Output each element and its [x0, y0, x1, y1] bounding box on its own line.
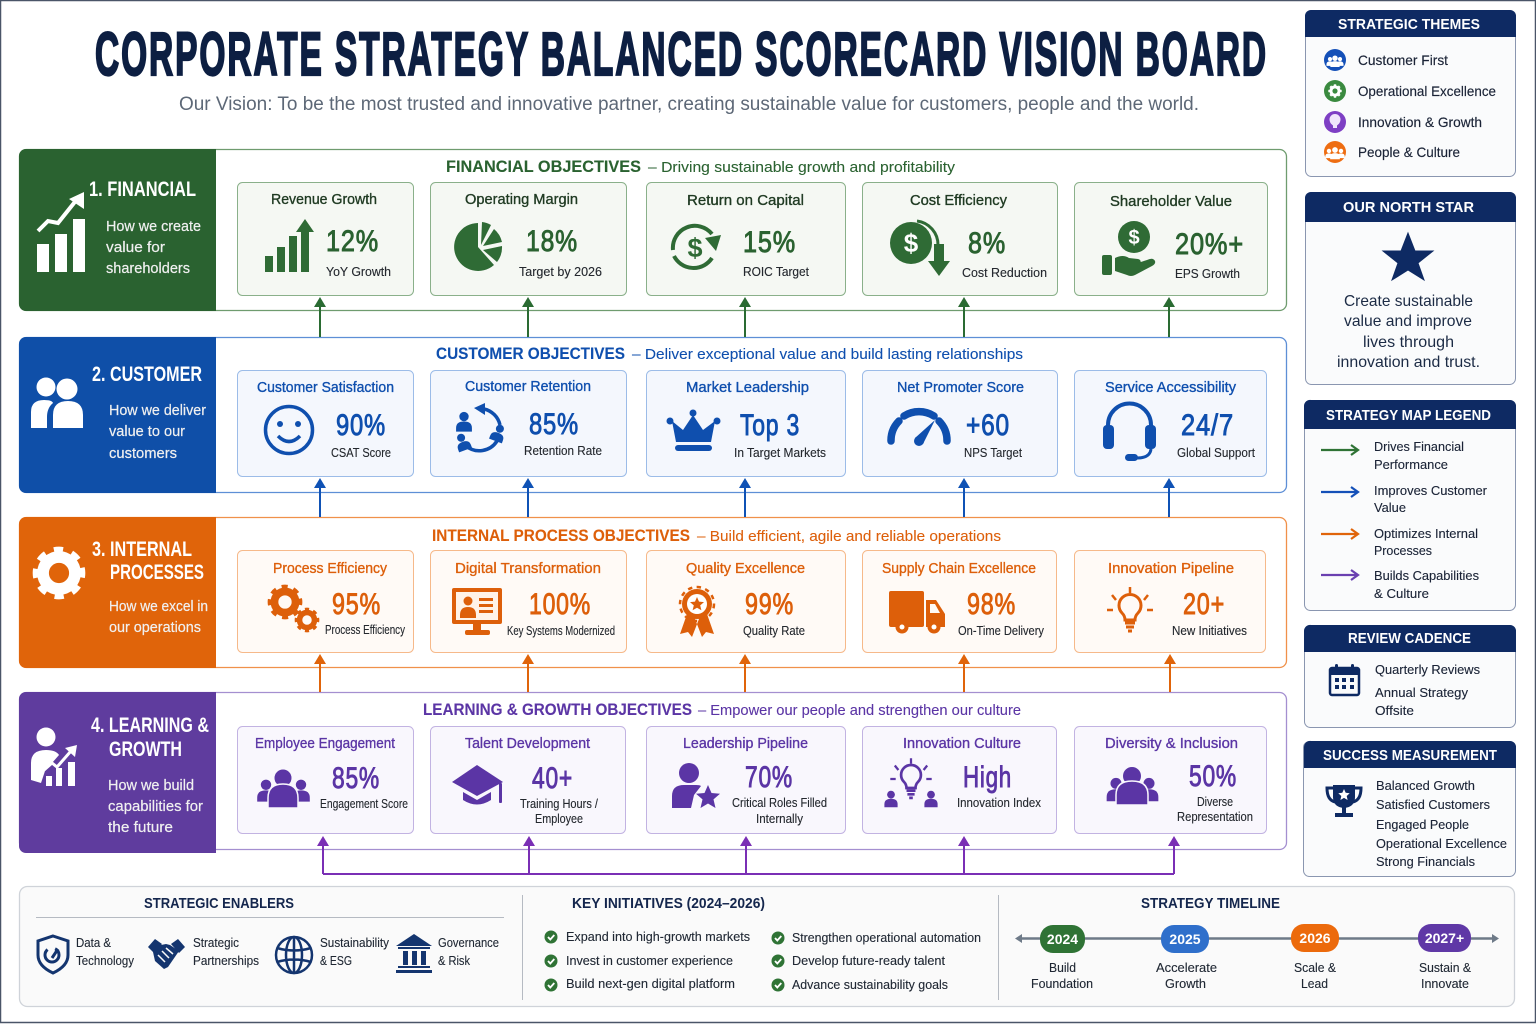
section: key initiatives: Build next-gen digital platform: [566, 977, 735, 991]
arrows: learning to internal processes: [314, 654, 1176, 692]
side panel: customer: value to our: [109, 423, 185, 440]
card: operating margin: Target by 2026: [519, 265, 602, 279]
side panel: internal processes: How we excel in: [109, 598, 208, 615]
card: digital transformation: 100%: [529, 588, 591, 621]
legend: optimizes internal processes: Optimizes Internal: [1374, 526, 1478, 541]
card: innovation culture: Innovation Index: [957, 796, 1042, 810]
heading: financial objectives: – Driving sustainable growth and profitability: [648, 159, 956, 176]
card: net promoter score: [862, 370, 1058, 476]
bottom panel: [20, 886, 1514, 1006]
card: innovation culture: [862, 726, 1056, 834]
text block: north star statement: lives through: [1363, 334, 1454, 351]
section: strategic enablers: STRATEGIC ENABLERS: [144, 895, 294, 912]
card: supply chain excellence: Supply Chain Excellence: [882, 560, 1036, 577]
sidebar: review cadence: [1304, 625, 1516, 728]
card: talent development: 40+: [532, 762, 573, 795]
section: key initiatives: Invest in customer experience: [566, 954, 733, 968]
icon: three people: [257, 769, 310, 808]
icon: crown: [666, 410, 720, 451]
card: return on capital: Return on Capital: [687, 192, 804, 209]
theme: innovation and growth: [1324, 111, 1482, 133]
enabler: strategic partnerships: Strategic: [193, 936, 239, 950]
card: diversity and inclusion: Representation: [1177, 810, 1253, 824]
card: market leadership: Market Leadership: [686, 379, 809, 396]
card: quality excellence: 99%: [745, 588, 794, 621]
icon: two gears: [270, 587, 318, 631]
icon: gauge: [891, 412, 947, 446]
icon: award ribbon: [680, 587, 714, 637]
legend: drives financial performance: Performance: [1374, 457, 1448, 472]
card: leadership pipeline: [646, 726, 846, 834]
heading: learning and growth objectives: [423, 700, 1021, 719]
icon: growth chart: [37, 192, 85, 272]
heading: customer objectives: – Deliver exceptional value and build lasting relationships: [632, 346, 1023, 363]
side panel: customer: 2. CUSTOMER: [92, 363, 202, 386]
milestone: 2024: [1031, 925, 1093, 991]
card: process efficiency: Process Efficiency: [273, 560, 387, 577]
card: market leadership: In Target Markets: [734, 446, 826, 460]
section: strategy timeline: [1015, 895, 1499, 991]
heading: financial objectives: [446, 157, 956, 176]
card: diversity and inclusion: 50%: [1189, 760, 1237, 793]
card: innovation culture: Innovation Culture: [903, 735, 1021, 752]
card: return on capital: 15%: [743, 226, 796, 259]
card: customer satisfaction: 90%: [336, 409, 386, 442]
card: employee engagement: [238, 726, 414, 834]
text block: north star statement: innovation and trust.: [1337, 354, 1480, 371]
enabler: governance and risk: Governance: [438, 936, 499, 950]
card: supply chain excellence: [862, 550, 1056, 652]
card: return on capital: [646, 182, 846, 296]
heading: customer objectives: CUSTOMER OBJECTIVES: [436, 344, 625, 363]
card: quality excellence: Quality Excellence: [686, 560, 805, 577]
card: customer retention: 85%: [529, 408, 579, 441]
legend: improves customer value: Value: [1374, 500, 1406, 515]
card: diversity and inclusion: [1074, 726, 1266, 834]
card: operating margin: 18%: [526, 225, 578, 258]
icon: trophy: [1327, 785, 1361, 817]
side panel: learning and growth: capabilities for: [108, 798, 203, 815]
heading: learning and growth objectives: LEARNING & GROWTH OBJECTIVES: [423, 700, 692, 719]
card: leadership pipeline: 70%: [745, 761, 793, 794]
card: net promoter score: +60: [966, 409, 1010, 442]
milestone: 2025: [1156, 925, 1217, 991]
milestone: 2026: [1291, 924, 1339, 991]
sidebar: strategic themes: STRATEGIC THEMES: [1338, 16, 1480, 33]
enabler: strategic partnerships: [148, 936, 259, 969]
side panel: learning and growth: [19, 692, 216, 853]
card: innovation pipeline: New Initiatives: [1172, 624, 1247, 638]
icon: graduation cap: [452, 765, 503, 804]
card: revenue growth: Revenue Growth: [271, 191, 377, 208]
icon: person with star: [672, 763, 720, 808]
card: innovation pipeline: Innovation Pipeline: [1108, 560, 1234, 577]
card: leadership pipeline: Internally: [756, 812, 804, 826]
card: talent development: Talent Development: [465, 735, 591, 752]
enabler: governance and risk: [396, 934, 499, 973]
enabler: data and technology: Data &: [76, 936, 112, 950]
card: revenue growth: 12%: [326, 225, 379, 258]
card: net promoter score: Net Promoter Score: [897, 379, 1024, 396]
card: supply chain excellence: On-Time Delivery: [958, 624, 1045, 638]
section: key initiatives: Develop future-ready talent: [792, 954, 946, 968]
side panel: customer: [19, 337, 216, 493]
card: talent development: Training Hours /: [520, 797, 598, 811]
side panel: internal processes: PROCESSES: [110, 561, 204, 584]
heading: internal process objectives: INTERNAL PROCESS OBJECTIVES: [432, 526, 690, 545]
icon: rising bars: [265, 219, 314, 272]
sidebar: strategy map legend: STRATEGY MAP LEGEND: [1326, 407, 1491, 424]
icon: retention cycle with people: [453, 403, 508, 452]
enabler: sustainability and ESG: [276, 936, 390, 973]
theme: customer first: Customer First: [1358, 52, 1448, 68]
milestone: 2024: 2024: [1047, 931, 1078, 947]
theme: operational excellence: Operational Excellence: [1358, 83, 1496, 99]
card: process efficiency: [238, 550, 414, 652]
legend: optimizes internal processes: Processes: [1374, 543, 1432, 558]
side panel: learning and growth: 4. LEARNING &: [91, 714, 209, 737]
side panel: financial: 1. FINANCIAL: [89, 178, 196, 201]
milestone: 2027+: [1418, 924, 1472, 991]
card: cost efficiency: Cost Efficiency: [910, 192, 1007, 209]
milestone: 2025: 2025: [1169, 931, 1201, 947]
text block: success criteria: Operational Excellence: [1376, 836, 1507, 851]
icon: star: [1383, 233, 1433, 280]
panel: learning and growth: [19, 692, 1286, 853]
legend: builds capabilities and culture: & Culture: [1374, 586, 1429, 601]
card: talent development: Employee: [535, 812, 583, 826]
card: diversity and inclusion: Diverse: [1197, 795, 1233, 809]
theme: customer first: [1324, 49, 1448, 71]
legend: drives financial performance: Drives Financial: [1374, 439, 1464, 454]
side panel: customer: How we deliver: [109, 402, 206, 419]
card: shareholder value: 20%+: [1175, 228, 1244, 261]
text block: review schedule: Offsite: [1375, 703, 1414, 718]
section: strategic enablers: [36, 895, 504, 973]
milestone: 2026: 2026: [1299, 930, 1331, 946]
card: net promoter score: NPS Target: [964, 446, 1022, 460]
side panel: customer: customers: [109, 445, 177, 462]
icon: light bulb: [1107, 587, 1153, 631]
side panel: financial: [19, 149, 216, 311]
enabler: sustainability and ESG: & ESG: [320, 954, 352, 968]
sidebar: our north star: [1305, 192, 1516, 384]
card: market leadership: [646, 370, 846, 476]
card: employee engagement: Employee Engagement: [255, 735, 396, 752]
card: process efficiency: 95%: [332, 588, 381, 621]
icon: headset: [1103, 404, 1156, 461]
card: shareholder value: EPS Growth: [1175, 267, 1240, 281]
text block: success criteria: Balanced Growth: [1376, 778, 1475, 793]
card: innovation pipeline: [1074, 550, 1266, 652]
subtitle: vision statement: Our Vision: To be the most trusted and innovative partner, creating sustainable value for customers, people and the world.: [179, 94, 1199, 115]
card: service accessibility: Service Accessibility: [1105, 379, 1236, 396]
milestone: 2027+: 2027+: [1425, 930, 1464, 946]
side panel: learning and growth: the future: [108, 819, 173, 836]
card: market leadership: Top 3: [740, 409, 800, 442]
enabler: strategic partnerships: Partnerships: [193, 954, 259, 968]
milestone: 2025: Accelerate: [1156, 961, 1217, 975]
card: customer retention: Customer Retention: [465, 378, 591, 395]
side panel: learning and growth: How we build: [108, 777, 194, 794]
card: cost efficiency: Cost Reduction: [962, 266, 1047, 280]
icon: pie chart: [454, 222, 502, 271]
section: key initiatives: Advance sustainability goals: [792, 978, 948, 992]
card: customer retention: [430, 370, 626, 476]
enabler: data and technology: [38, 936, 135, 973]
icon: bulb with people: [884, 758, 938, 807]
arrows: customer to financial: [314, 297, 1175, 337]
card: service accessibility: Global Support: [1177, 446, 1255, 460]
card: shareholder value: Shareholder Value: [1110, 193, 1232, 210]
icon: smiley: [266, 406, 312, 454]
card: leadership pipeline: Critical Roles Filled: [732, 796, 827, 810]
milestone: 2027+: Sustain &: [1419, 961, 1472, 975]
text block: north star statement: Create sustainable: [1344, 293, 1473, 310]
text block: review schedule: Annual Strategy: [1375, 685, 1468, 700]
icon: hand holding coin: $: [1128, 227, 1140, 249]
card: employee engagement: 85%: [332, 762, 380, 795]
text block: success criteria: Strong Financials: [1376, 854, 1475, 869]
card: customer satisfaction: [238, 370, 414, 476]
section: key initiatives: KEY INITIATIVES (2024–2026): [572, 895, 765, 912]
card: digital transformation: [430, 550, 626, 652]
icon: two people: [31, 378, 83, 428]
card: revenue growth: YoY Growth: [326, 265, 391, 279]
card: operating margin: Operating Margin: [465, 191, 578, 208]
icon: circular arrows with dollar: [673, 226, 721, 268]
text block: review schedule: [1375, 662, 1480, 718]
card: digital transformation: Digital Transformation: [455, 560, 601, 577]
section: key initiatives: [544, 895, 981, 992]
icon: delivery truck: [889, 591, 945, 634]
sidebar: strategic themes: [1305, 10, 1516, 176]
legend: improves customer value: Improves Customer: [1374, 483, 1488, 498]
heading: learning and growth objectives: – Empower our people and strengthen our culture: [698, 702, 1021, 719]
sidebar: our north star: OUR NORTH STAR: [1343, 199, 1474, 216]
panel: internal processes: [19, 517, 1286, 668]
card: digital transformation: Key Systems Modernized: [507, 624, 615, 638]
section: strategy timeline: STRATEGY TIMELINE: [1141, 895, 1280, 912]
milestone: 2024: Build: [1049, 961, 1076, 975]
side panel: internal processes: our operations: [109, 619, 201, 636]
milestone: 2026: Lead: [1301, 977, 1328, 991]
card: customer satisfaction: Customer Satisfaction: [257, 379, 394, 396]
theme: operational excellence: [1324, 80, 1496, 102]
card: return on capital: ROIC Target: [743, 265, 809, 279]
card: employee engagement: Engagement Score: [320, 797, 408, 811]
icon: calendar: [1330, 664, 1359, 695]
card: cost efficiency: 8%: [968, 227, 1006, 260]
legend: builds capabilities and culture: [1321, 568, 1479, 601]
side panel: financial: How we create: [106, 218, 201, 235]
card: process efficiency: Process Efficiency: [325, 623, 406, 637]
legend: optimizes internal processes: [1321, 526, 1478, 558]
milestone: 2024: Foundation: [1031, 977, 1093, 991]
text block: success criteria: Satisfied Customers: [1376, 797, 1490, 812]
icon: coin with down arrow: [890, 221, 950, 276]
milestone: 2027+: Innovate: [1421, 977, 1469, 991]
section: key initiatives: Strengthen operational automation: [792, 931, 981, 945]
legend: builds capabilities and culture: Builds Capabilities: [1374, 568, 1479, 583]
text block: north star statement: value and improve: [1344, 313, 1472, 330]
heading: internal process objectives: – Build efficient, agile and reliable operations: [697, 528, 1001, 545]
enabler: data and technology: Technology: [76, 954, 135, 968]
text block: success criteria: Engaged People: [1376, 817, 1469, 832]
card: shareholder value: [1074, 182, 1268, 296]
card: quality excellence: Quality Rate: [743, 624, 805, 638]
milestone: 2026: Scale &: [1294, 961, 1337, 975]
icon: group of people: [1107, 766, 1158, 805]
heading: customer objectives: [436, 344, 1023, 363]
panel: customer: [19, 337, 1286, 493]
arrows: internal processes to customer: [314, 478, 1175, 517]
enabler: governance and risk: & Risk: [438, 954, 471, 968]
legend: improves customer value: [1321, 483, 1488, 515]
sidebar: success measurement: [1304, 741, 1516, 876]
icon: monitor with profile: [452, 588, 502, 635]
card: quality excellence: [646, 550, 846, 652]
icon: coin with down arrow: $: [904, 228, 919, 258]
theme: people and culture: People & Culture: [1358, 144, 1460, 160]
sidebar: success measurement: SUCCESS MEASUREMENT: [1323, 747, 1497, 764]
icon: gear: [36, 550, 82, 596]
card: customer retention: Retention Rate: [524, 444, 602, 458]
side panel: financial: value for: [106, 239, 165, 256]
card: service accessibility: 24/7: [1181, 409, 1234, 442]
card: cost efficiency: [862, 182, 1058, 296]
sidebar: strategy map legend: [1304, 400, 1516, 610]
text block: north star statement: [1337, 293, 1480, 371]
card: diversity and inclusion: Diversity & Inclusion: [1105, 735, 1238, 752]
theme: people and culture: [1324, 141, 1460, 163]
side panel: learning and growth: GROWTH: [109, 738, 182, 761]
card: innovation pipeline: 20+: [1183, 588, 1225, 621]
icon: hand holding coin: [1102, 221, 1155, 276]
milestone: 2025: Growth: [1165, 977, 1206, 991]
section: key initiatives: Expand into high-growth markets: [566, 930, 750, 944]
card: innovation culture: High: [963, 761, 1012, 794]
sidebar: review cadence: REVIEW CADENCE: [1348, 630, 1471, 647]
icon: person with growth chart: [31, 728, 77, 786]
theme: innovation and growth: Innovation & Growth: [1358, 114, 1482, 130]
side panel: financial: shareholders: [106, 260, 190, 277]
side panel: internal processes: 3. INTERNAL: [92, 538, 192, 561]
card: talent development: [430, 726, 626, 834]
icon: circular arrows with dollar: $: [687, 233, 703, 263]
heading: internal process objectives: [432, 526, 1001, 545]
card: supply chain excellence: 98%: [967, 588, 1016, 621]
card: leadership pipeline: Leadership Pipeline: [683, 735, 808, 752]
card: service accessibility: [1074, 370, 1266, 476]
text block: review schedule: Quarterly Reviews: [1375, 662, 1480, 677]
side panel: internal processes: [19, 517, 216, 668]
card: operating margin: [430, 182, 626, 296]
panel: financial: [19, 149, 1286, 311]
arrows: foundation bus to learning: [317, 836, 1180, 874]
text block: success criteria: [1376, 778, 1507, 869]
legend: drives financial performance: [1321, 439, 1464, 472]
card: revenue growth: [238, 182, 414, 296]
heading: financial objectives: FINANCIAL OBJECTIVES: [446, 157, 641, 176]
card: customer satisfaction: CSAT Score: [331, 446, 391, 460]
enabler: sustainability and ESG: Sustainability: [320, 936, 390, 950]
